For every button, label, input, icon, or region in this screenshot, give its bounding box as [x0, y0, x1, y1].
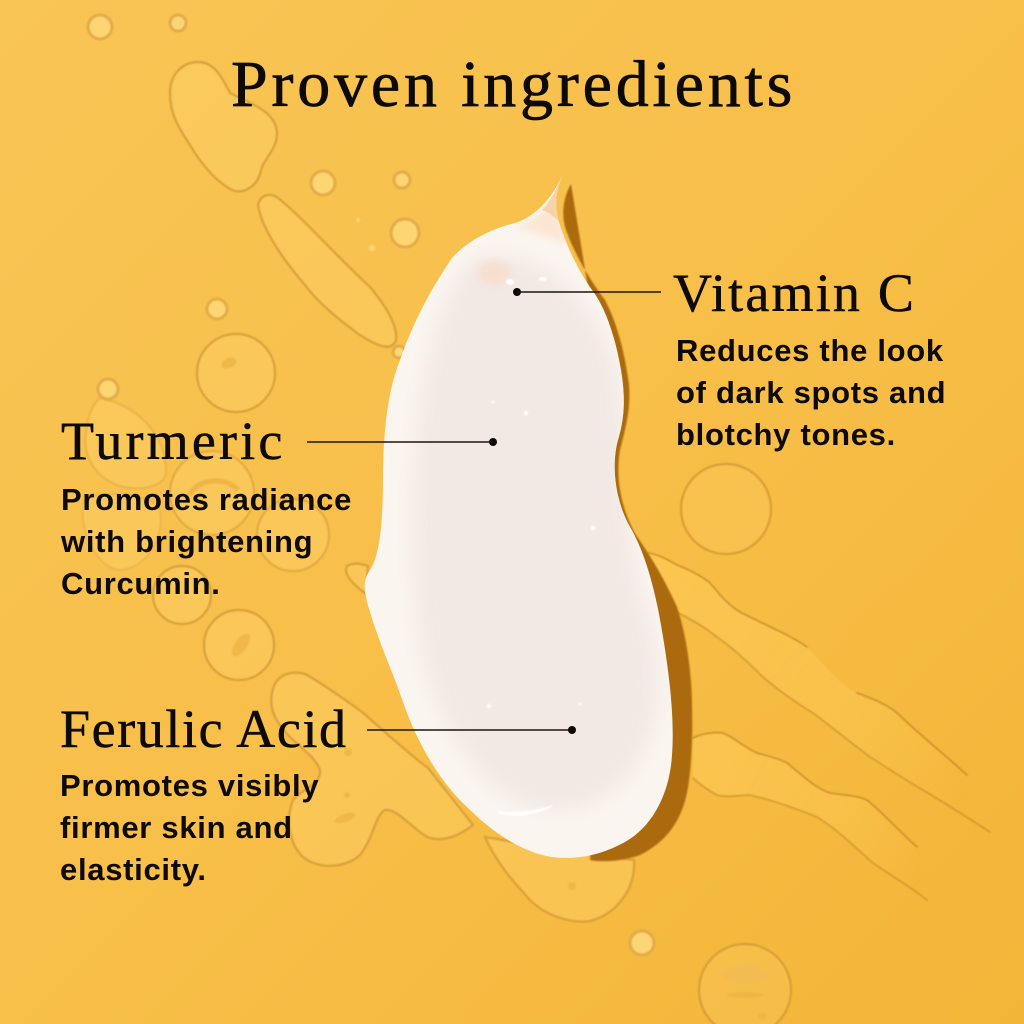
- leader line: Vitamin C: [513, 288, 661, 296]
- callout: Vitamin C: [513, 263, 946, 452]
- text: Turmeric description: with brightening: [61, 524, 313, 559]
- heading: Ferulic Acid: Ferulic Acid: [60, 699, 348, 759]
- cream tip: [542, 176, 562, 222]
- cream glints: [487, 277, 595, 815]
- droplet inner marks: [190, 355, 767, 1020]
- cream swatch: [365, 176, 673, 858]
- text: Ferulic Acid description: Promotes visibly: [60, 768, 319, 803]
- text: Vitamin C description: [676, 333, 946, 452]
- text: Vitamin C description: Reduces the look: [676, 333, 944, 368]
- oil streaks on the right: [648, 553, 990, 900]
- callout: Turmeric: [60, 411, 497, 601]
- text: Vitamin C description: blotchy tones.: [676, 417, 896, 452]
- leader line: Turmeric: [307, 438, 497, 446]
- text: Ferulic Acid description: [60, 727, 576, 887]
- oil droplets: [83, 62, 791, 1024]
- text: Turmeric description: Curcumin.: [61, 566, 221, 601]
- heading: Vitamin C: Vitamin C: [673, 263, 916, 323]
- title: Proven ingredients: [231, 48, 796, 121]
- heading: Turmeric: Turmeric: [61, 411, 286, 471]
- text: Ferulic Acid description: firmer skin and: [60, 810, 293, 845]
- text: Ferulic Acid description: elasticity.: [60, 852, 207, 887]
- leader line: Ferulic Acid: [367, 726, 576, 734]
- text: Turmeric description: [60, 482, 352, 601]
- text: Vitamin C description: of dark spots and: [676, 375, 946, 410]
- callout: Ferulic Acid: [60, 699, 576, 887]
- text: Turmeric description: Promotes radiance: [61, 482, 352, 517]
- small droplets: [88, 15, 654, 955]
- cream shadow: [563, 184, 692, 861]
